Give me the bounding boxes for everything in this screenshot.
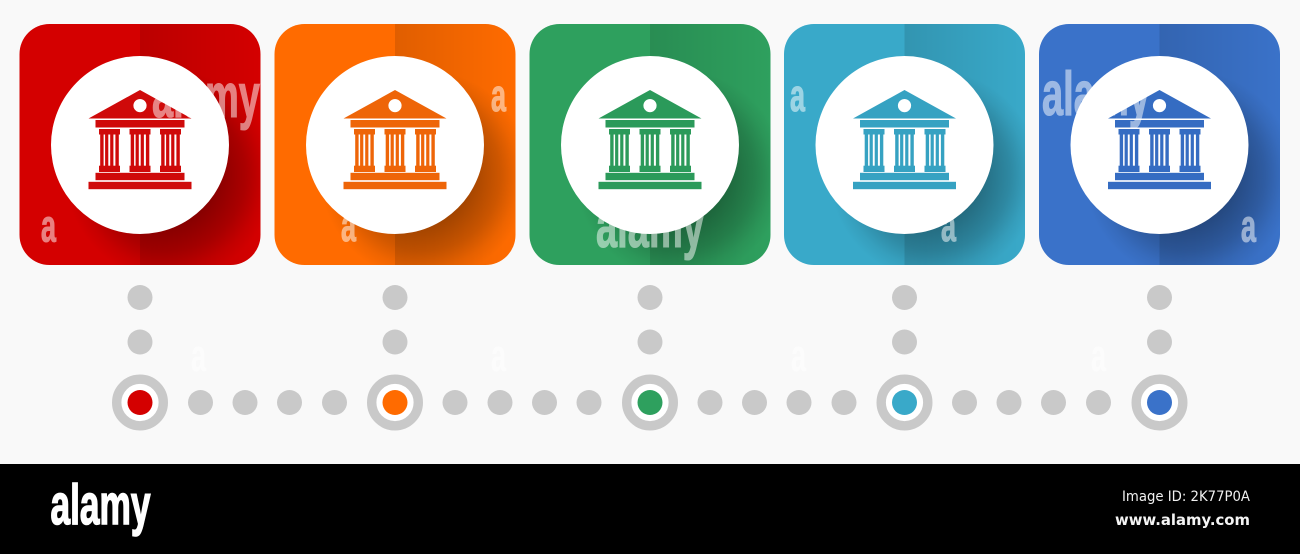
faint watermark letters on background: a — [491, 330, 507, 381]
faint watermark letters on background — [191, 330, 1107, 381]
watermark text overlays: alamy — [1042, 60, 1150, 129]
timeline node: teal — [881, 379, 928, 426]
watermark text overlays: a — [341, 200, 357, 251]
icon: red bank building in white circle — [51, 56, 229, 234]
timeline node: green — [627, 379, 673, 426]
watermark text overlays: a — [790, 70, 806, 121]
watermark text overlays: a — [491, 70, 507, 121]
timeline node: orange — [372, 379, 418, 426]
panel: teal bank icon — [784, 24, 1025, 265]
watermark text overlays: a — [1241, 200, 1257, 252]
footer bar — [0, 464, 1300, 554]
faint watermark letters on background: a — [791, 330, 807, 381]
timeline node: red — [117, 379, 163, 426]
footer image id: Image ID: 2K77P0A — [1122, 489, 1250, 505]
panel: green bank icon — [530, 24, 770, 265]
watermark text overlays: a — [941, 200, 957, 251]
icon: blue bank building in white circle — [1070, 56, 1248, 234]
timeline: vertical connector dots — [128, 285, 1172, 354]
footer website: www.alamy.com — [1115, 511, 1250, 529]
panel: orange bank icon — [274, 24, 516, 265]
timeline node: blue — [1136, 379, 1183, 426]
footer logo: alamy: alamy — [50, 473, 151, 537]
icon: orange bank building in white circle — [306, 56, 484, 234]
watermark text overlays: a — [41, 200, 57, 252]
faint watermark letters on background: a — [191, 330, 207, 381]
panel: red bank icon — [20, 24, 260, 265]
watermark text overlays: alamy — [596, 192, 704, 261]
icon: teal bank building in white circle — [816, 56, 994, 234]
watermark text overlays — [41, 60, 1257, 261]
panel: blue bank icon — [1039, 24, 1280, 265]
timeline: horizontal connector dots — [188, 390, 1111, 415]
icon: green bank building in white circle — [561, 56, 739, 234]
faint watermark letters on background: a — [1091, 330, 1107, 381]
watermark text overlays: alamy — [152, 62, 260, 131]
